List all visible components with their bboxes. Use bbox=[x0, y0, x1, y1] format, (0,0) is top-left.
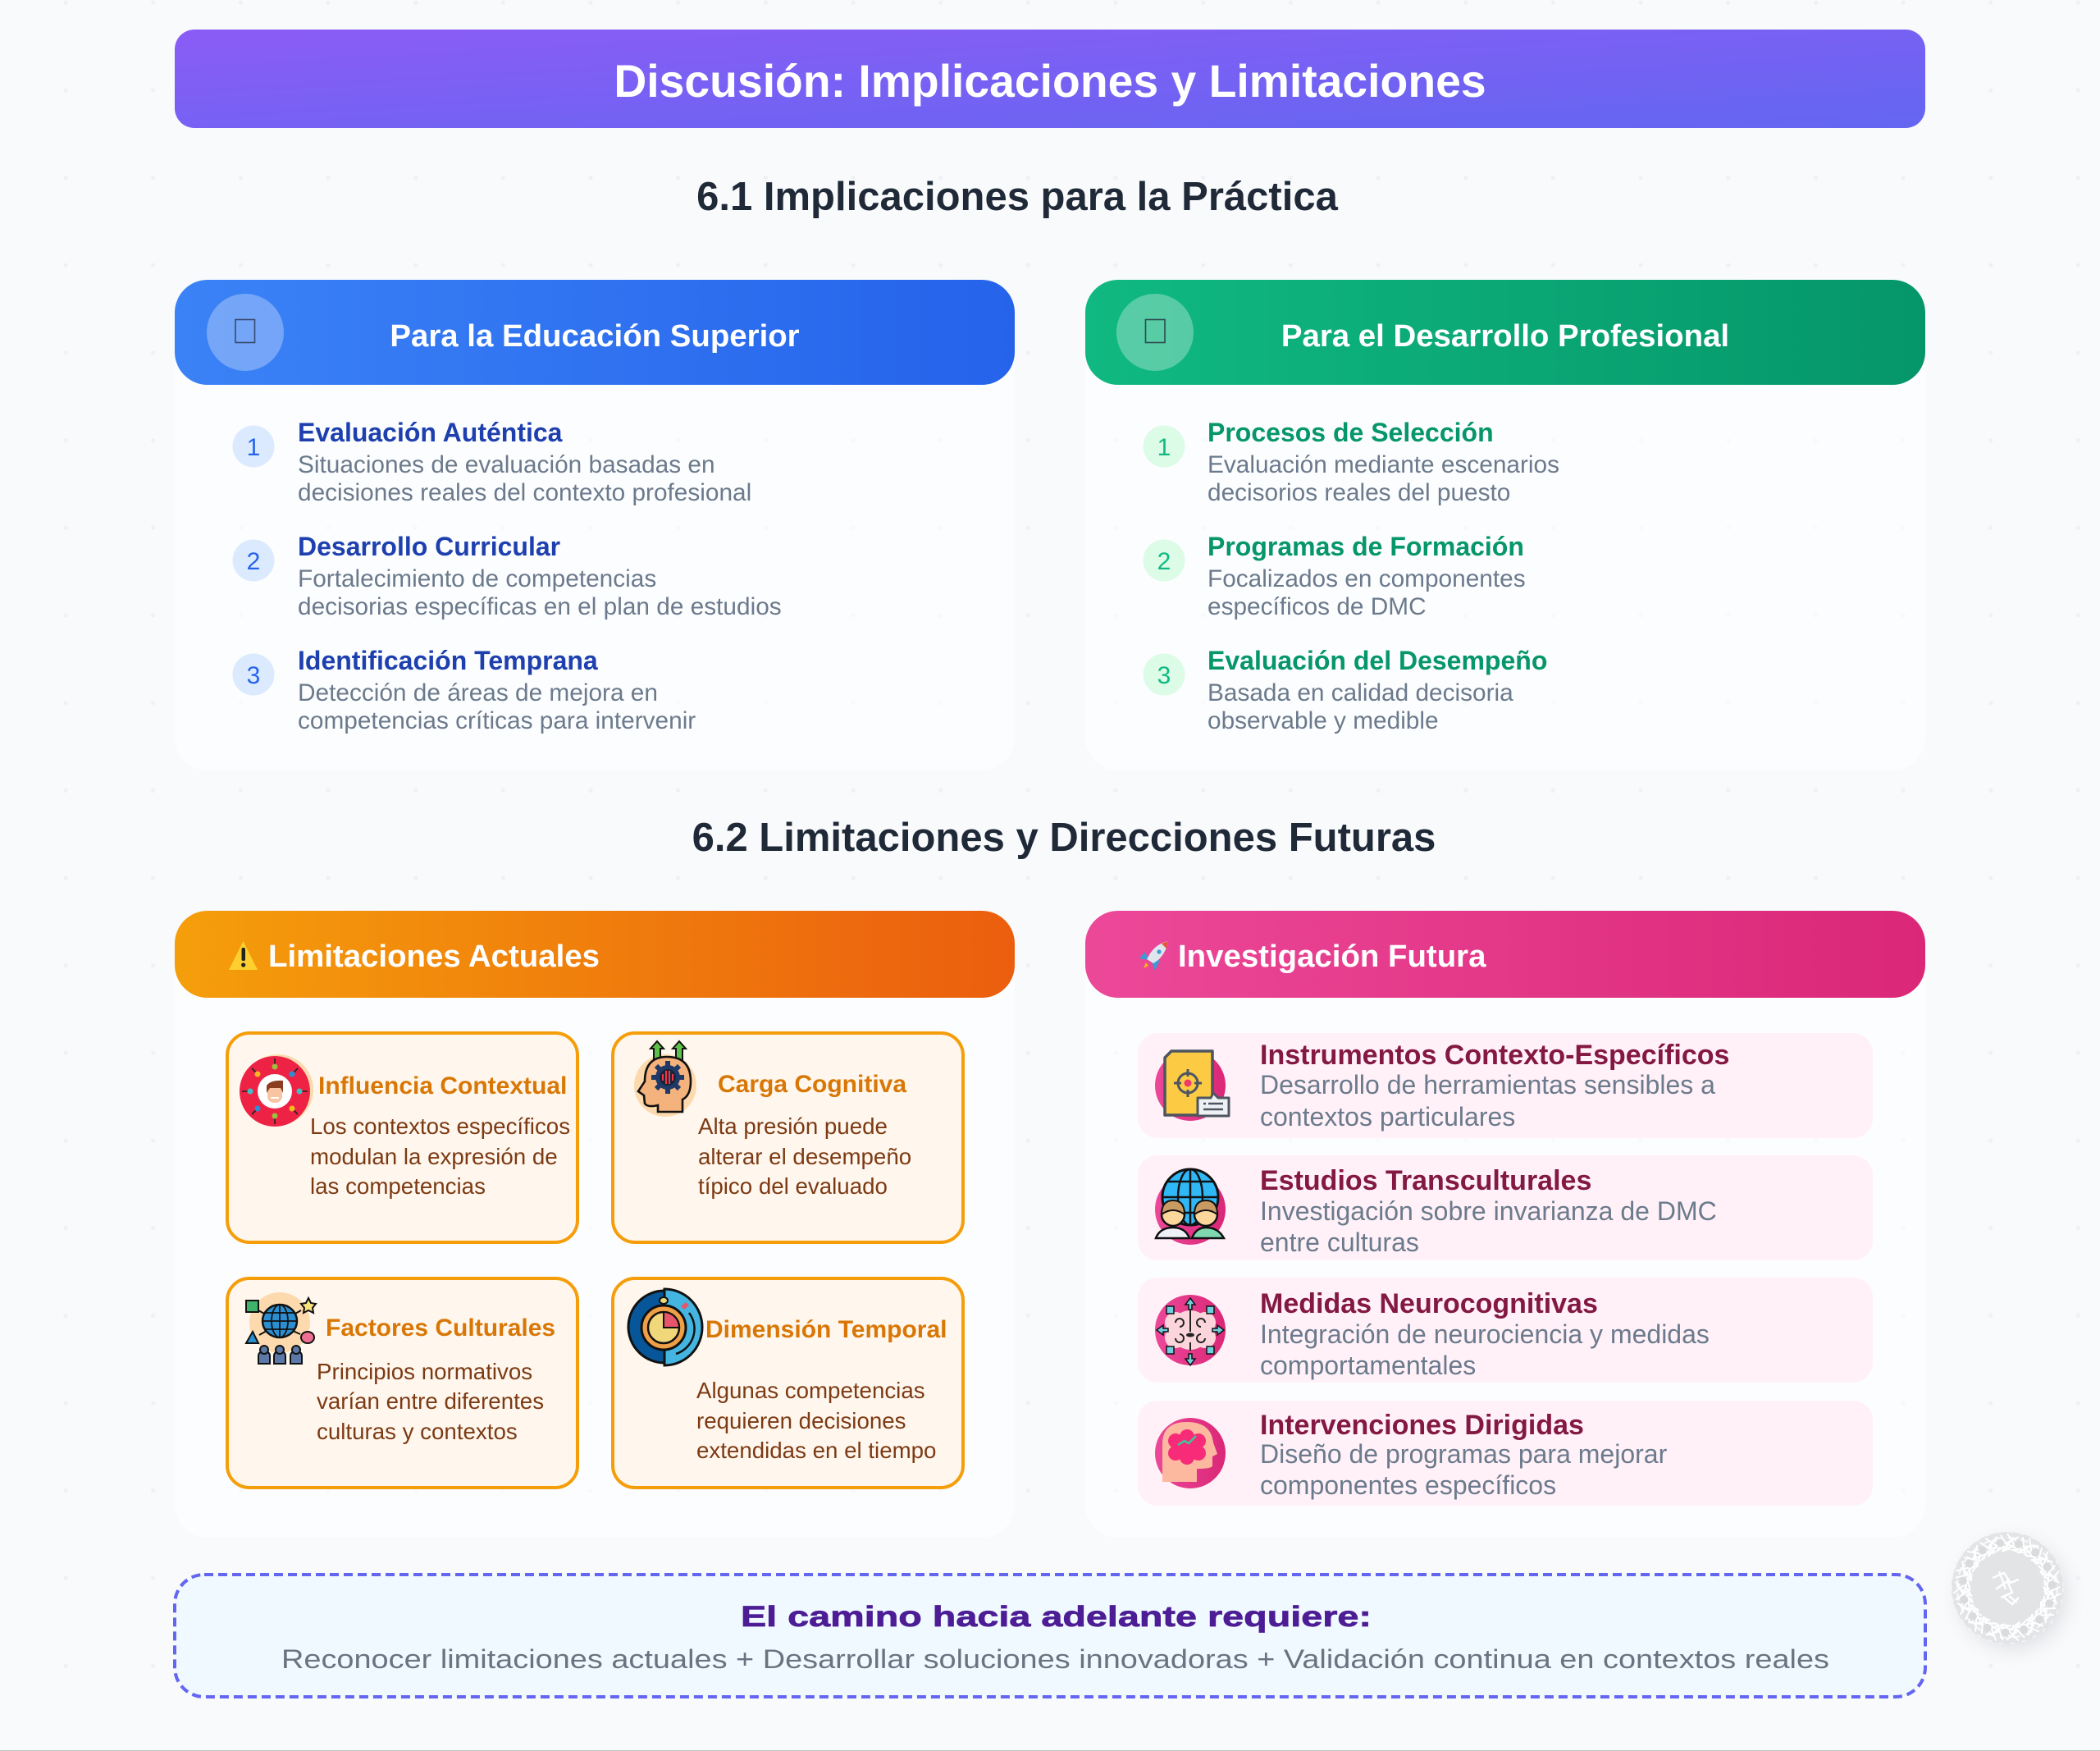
item 2 bbox=[1144, 532, 1526, 620]
item 2: Fortalecimiento de competencias bbox=[298, 565, 656, 592]
item 3 bbox=[1144, 646, 1547, 734]
heading: 6.2: 6.2 Limitaciones y Direcciones Futuras bbox=[692, 816, 1436, 860]
item 3: Basada en calidad decisoria bbox=[1208, 679, 1513, 706]
item 2: 2 bbox=[1157, 548, 1171, 575]
icon: missing glyph badge bbox=[207, 294, 284, 371]
item: instrumentos bbox=[1138, 1033, 1873, 1138]
item: estudios transculturales: entre culturas bbox=[1260, 1228, 1419, 1257]
title banner bbox=[175, 30, 1925, 128]
icon: rocket bbox=[1139, 941, 1168, 971]
panel heading: Investigación Futura bbox=[1178, 939, 1486, 974]
item: intervenciones dirigidas: Intervenciones Dirigidas bbox=[1260, 1410, 1584, 1441]
item: intervenciones dirigidas: componentes específicos bbox=[1260, 1470, 1556, 1500]
card text: Alta presión puede bbox=[698, 1113, 888, 1139]
icon: head with brain bbox=[1155, 1418, 1226, 1488]
callout: el camino hacia adelante bbox=[175, 1575, 1925, 1697]
item 2: específicos de DMC bbox=[1208, 593, 1427, 620]
icon: globe and people bbox=[1155, 1169, 1226, 1245]
callout: el camino hacia adelante: El camino hacia adelante requiere: bbox=[741, 1601, 1372, 1633]
item 1: 1 bbox=[247, 434, 260, 461]
card title: Factores Culturales bbox=[326, 1314, 555, 1342]
card title: Influencia Contextual bbox=[318, 1072, 567, 1100]
item: estudios transculturales: Investigación sobre invarianza de DMC bbox=[1260, 1196, 1717, 1226]
panel: investigación futura bbox=[1085, 911, 1925, 1538]
item 2: Programas de Formación bbox=[1208, 532, 1524, 561]
item 2 bbox=[233, 532, 782, 620]
card text: Los contextos específicos bbox=[310, 1113, 570, 1139]
panel: desarrollo profesional bbox=[1085, 280, 1925, 770]
item: medidas neurocognitivas bbox=[1138, 1278, 1873, 1383]
card: dimensión temporal bbox=[613, 1278, 963, 1488]
item 2: decisorias específicas en el plan de estudios bbox=[298, 593, 782, 620]
icon: warning bbox=[229, 941, 258, 970]
item 1: decisorios reales del puesto bbox=[1208, 479, 1510, 506]
card: influencia contextual bbox=[227, 1033, 578, 1242]
item: estudios transculturales bbox=[1138, 1155, 1873, 1260]
card text: modulan la expresión de bbox=[310, 1144, 558, 1169]
icon: stopwatch bbox=[628, 1289, 702, 1365]
item 3: 3 bbox=[247, 662, 260, 689]
item 3: 3 bbox=[1157, 662, 1171, 689]
card: carga cognitiva bbox=[613, 1033, 963, 1242]
card text: extendidas en el tiempo bbox=[696, 1438, 936, 1463]
item 3 bbox=[233, 646, 696, 734]
icon: brain with arrows bbox=[1155, 1295, 1226, 1365]
item 1 bbox=[1144, 418, 1559, 506]
card text bbox=[696, 1378, 936, 1463]
panel heading: Para la Educación Superior bbox=[390, 318, 800, 354]
card text: requieren decisiones bbox=[696, 1408, 906, 1433]
icon: missing glyph badge bbox=[1116, 294, 1194, 371]
watermark: lace circle bbox=[1952, 1532, 2067, 1649]
title banner: Discusión: Implicaciones y Limitaciones bbox=[614, 56, 1486, 107]
item 1: Evaluación Auténtica bbox=[298, 418, 563, 447]
item: instrumentos: Instrumentos Contexto-Específicos bbox=[1260, 1040, 1729, 1071]
item 2: Focalizados en componentes bbox=[1208, 565, 1526, 592]
item 3: observable y medible bbox=[1208, 707, 1439, 734]
card: factores culturales bbox=[227, 1278, 578, 1488]
card text bbox=[310, 1113, 570, 1199]
item 1: 1 bbox=[1157, 434, 1171, 461]
item: medidas neurocognitivas: Medidas Neurocognitivas bbox=[1260, 1288, 1598, 1319]
card text: culturas y contextos bbox=[317, 1419, 518, 1444]
item 1: decisiones reales del contexto profesional bbox=[298, 479, 751, 506]
icon: contextual network bbox=[240, 1054, 313, 1127]
item 3: Detección de áreas de mejora en bbox=[298, 679, 658, 706]
card text: alterar el desempeño bbox=[698, 1144, 911, 1169]
card title: Dimensión Temporal bbox=[705, 1316, 947, 1343]
card text: varían entre diferentes bbox=[317, 1388, 544, 1414]
item 1 bbox=[233, 418, 751, 506]
panel: educación superior bbox=[175, 280, 1015, 770]
item: intervenciones dirigidas bbox=[1138, 1401, 1873, 1506]
item: medidas neurocognitivas: Integración de neurociencia y medidas bbox=[1260, 1319, 1710, 1349]
card text bbox=[317, 1359, 544, 1444]
item 1: Situaciones de evaluación basadas en bbox=[298, 451, 715, 478]
item 1: Procesos de Selección bbox=[1208, 418, 1494, 447]
item 1: Evaluación mediante escenarios bbox=[1208, 451, 1559, 478]
icon: cognitive load head bbox=[634, 1041, 696, 1117]
heading: 6.1: 6.1 Implicaciones para la Práctica bbox=[696, 175, 1339, 219]
card text bbox=[698, 1113, 911, 1199]
card text: Principios normativos bbox=[317, 1359, 532, 1384]
card text: típico del evaluado bbox=[698, 1173, 888, 1199]
item: intervenciones dirigidas: Diseño de programas para mejorar bbox=[1260, 1439, 1668, 1469]
item: instrumentos: Desarrollo de herramientas sensibles a bbox=[1260, 1070, 1715, 1100]
panel: limitaciones actuales bbox=[175, 911, 1015, 1538]
item 2: 2 bbox=[247, 548, 260, 575]
item 3: Evaluación del Desempeño bbox=[1208, 646, 1547, 675]
item 3: competencias críticas para intervenir bbox=[298, 707, 696, 734]
item: estudios transculturales: Estudios Transculturales bbox=[1260, 1165, 1591, 1196]
item: instrumentos: contextos particulares bbox=[1260, 1102, 1515, 1132]
bottom edge line bbox=[0, 1750, 2100, 1751]
panel heading: Limitaciones Actuales bbox=[268, 939, 600, 974]
card title: Carga Cognitiva bbox=[718, 1071, 906, 1098]
panel heading: Para el Desarrollo Profesional bbox=[1281, 318, 1729, 354]
item 2: Desarrollo Curricular bbox=[298, 532, 560, 561]
callout: el camino hacia adelante: Reconocer limitaciones actuales + Desarrollar soluciones innovadoras + Validación continua en contextos reales bbox=[281, 1644, 1829, 1674]
item 3: Identificación Temprana bbox=[298, 646, 598, 675]
card text: las competencias bbox=[310, 1173, 486, 1199]
card text: Algunas competencias bbox=[696, 1378, 925, 1403]
icon: document with target bbox=[1155, 1050, 1229, 1121]
item: medidas neurocognitivas: comportamentales bbox=[1260, 1351, 1476, 1380]
icon: cultural globe bbox=[246, 1292, 316, 1364]
